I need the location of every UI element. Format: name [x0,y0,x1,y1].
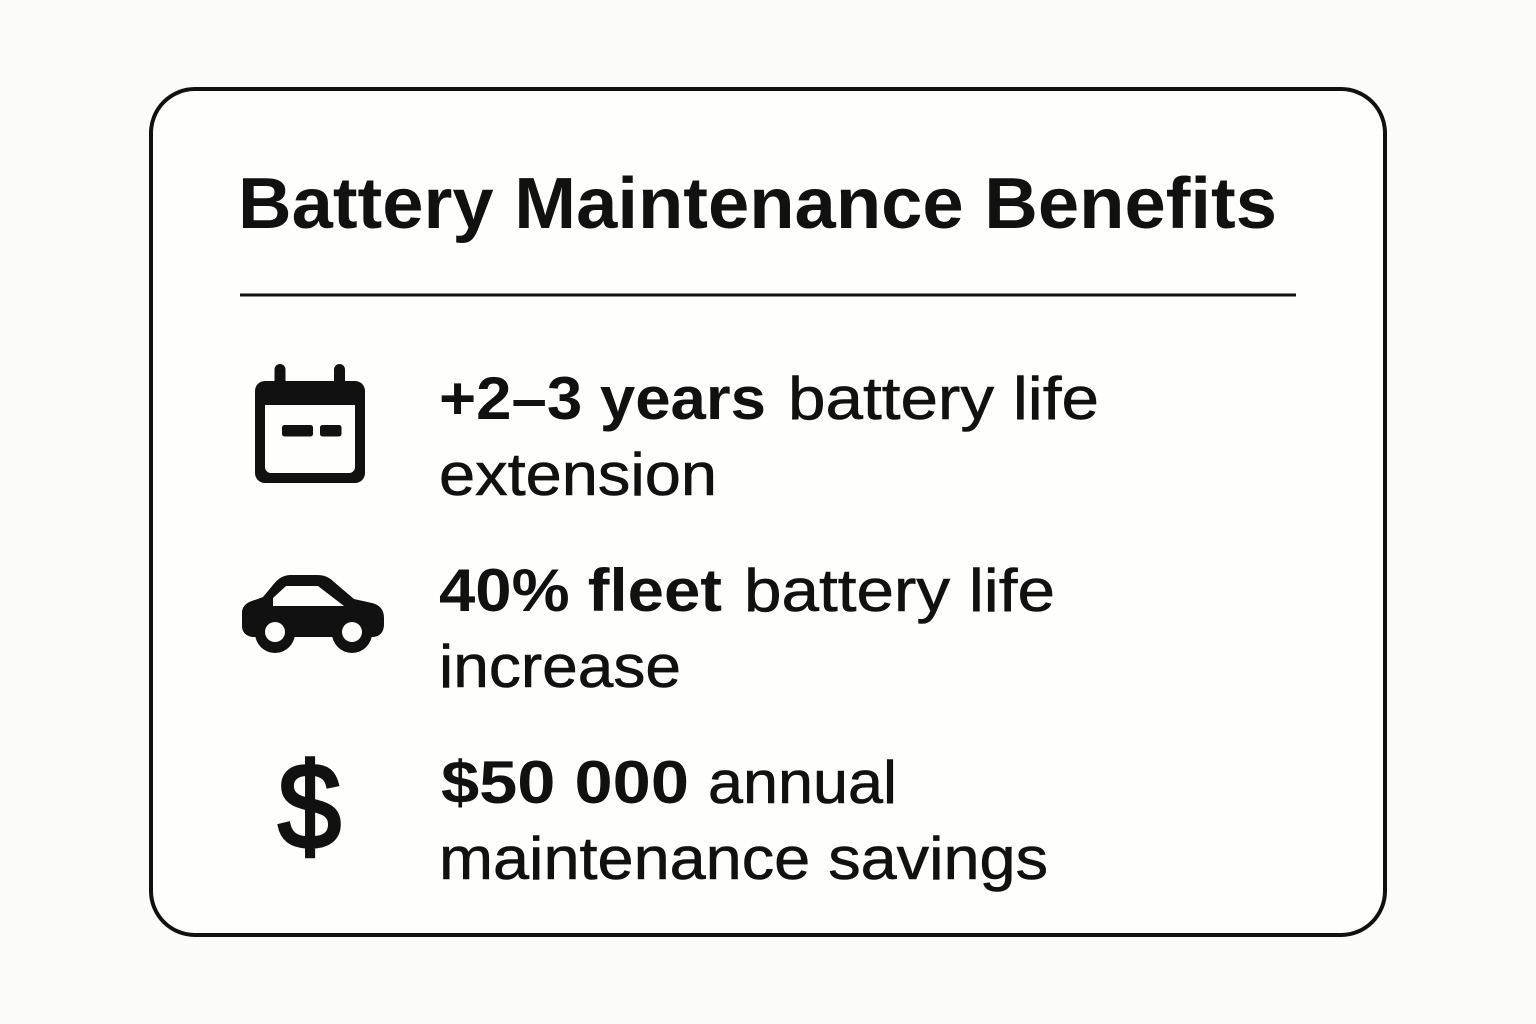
text: battery life extension: extension [439,441,717,508]
icon: dollar sign: $ [278,738,341,874]
panel: benefits card [151,89,1385,935]
icon: car [242,575,384,653]
text: annual maintenance savings: annual [708,749,897,816]
text: battery life extension: +2–3 years [439,365,766,432]
icon: calendar with battery [255,364,365,483]
benefit row: battery life extension [255,364,1099,508]
text: battery life extension [439,365,1099,508]
text: fleet battery life increase: battery life [744,557,1055,624]
text: battery life extension: battery life [788,365,1099,432]
benefit row: annual maintenance savings [278,738,1048,892]
text: fleet battery life increase: increase [439,633,681,700]
benefit row: fleet battery life increase [242,557,1055,700]
text: fleet battery life increase: 40% fleet [439,557,722,624]
text: annual maintenance savings: maintenance savings [439,825,1048,892]
title: Battery Maintenance Benefits [238,164,1277,244]
text: annual maintenance savings [439,749,1048,892]
text: annual maintenance savings: $50 000 [441,749,689,816]
text: fleet battery life increase [439,557,1055,700]
